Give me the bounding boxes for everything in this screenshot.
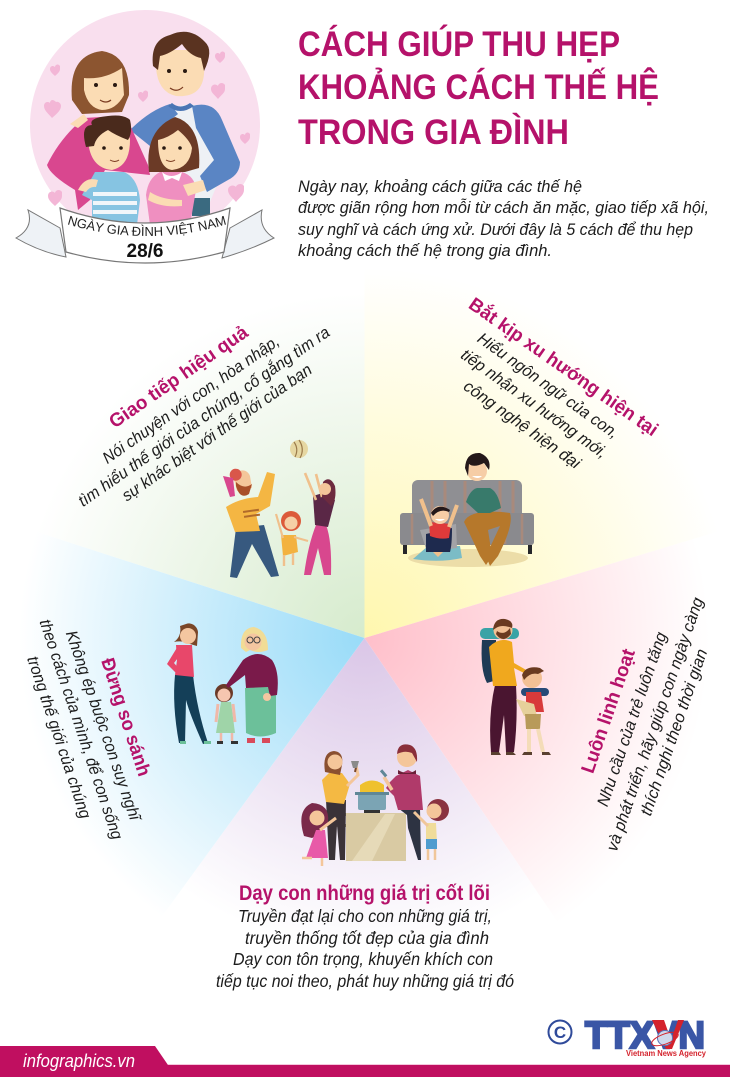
man <box>464 453 511 566</box>
panel: Dạy con những giá trị cốt lõi <box>216 744 514 991</box>
body text: sự khác biệt với thế giới của bạn <box>119 361 315 505</box>
boy <box>421 499 457 557</box>
child <box>215 684 238 744</box>
grandmother <box>226 627 278 743</box>
heading: Luôn linh hoạt <box>578 646 640 776</box>
body text: công nghệ hiện đại <box>460 377 585 473</box>
body text: tiếp tục noi theo, phát huy những giá trị đó <box>216 971 514 991</box>
illustration: family portrait with banner <box>15 10 275 264</box>
girl <box>276 511 308 566</box>
body text: Hiểu ngôn ngữ của con, <box>474 330 622 442</box>
title: KHOẢNG CÁCH THẾ HỆ <box>298 67 659 107</box>
body text: Truyền đạt lại cho con những giá trị, <box>238 906 492 926</box>
counter <box>324 813 406 861</box>
intro text: suy nghĩ và cách ứng xử. Dưới đây là 5 cách để thu hẹp <box>298 221 693 239</box>
body text <box>216 906 514 991</box>
father <box>130 32 240 216</box>
intro text: Ngày nay, khoảng cách giữa các thế hệ <box>298 178 582 196</box>
panel: Giao tiếp hiệu quả <box>74 322 335 578</box>
panel: Đừng so sánh <box>23 617 278 843</box>
body text: Nhu cầu của trẻ luôn tăng <box>594 629 671 809</box>
body text: Không ép buộc con suy nghĩ <box>62 628 145 825</box>
logo: TTXVN: TTXVN <box>585 1015 705 1057</box>
footer site name: infographics.vn <box>23 1051 135 1071</box>
illustration: family playing ball <box>223 440 336 578</box>
banner date: 28/6 <box>127 241 163 262</box>
intro text <box>298 178 709 260</box>
footer bar <box>0 1046 730 1077</box>
daughter <box>301 803 336 866</box>
body text: tìm hiểu thế giới của chúng, cố gắng tìm ra <box>74 323 333 510</box>
illustration: father and son hiking <box>480 619 551 755</box>
logo: TTXVN: Vietnam News Agency <box>626 1049 707 1058</box>
cooking pot <box>355 780 389 813</box>
body text: Dạy con tôn trọng, khuyến khích con <box>233 949 493 969</box>
panel: Luôn linh hoạt <box>480 594 711 854</box>
son <box>78 116 140 225</box>
mother <box>304 473 336 575</box>
body text: truyền thống tốt đẹp của gia đình <box>245 928 489 948</box>
mother <box>322 751 359 860</box>
mother <box>47 51 150 210</box>
intro text: được giãn rộng hơn mỗi từ cách ăn mặc, giao tiếp xã hội, <box>298 198 709 217</box>
copyright mark <box>548 1020 572 1044</box>
father <box>480 619 528 755</box>
title <box>298 24 659 152</box>
father <box>223 469 279 578</box>
son <box>414 799 449 860</box>
son <box>516 667 551 755</box>
intro text: khoảng cách thế hệ trong gia đình. <box>298 242 552 260</box>
heading: Đừng so sánh <box>96 656 154 779</box>
heading: Dạy con những giá trị cốt lõi <box>239 882 490 905</box>
body text: Nói chuyện với con, hòa nhập, <box>99 332 283 467</box>
heading: Bắt kịp xu hướng hiện tại <box>465 293 662 441</box>
body text: trong thế giới của chúng <box>23 654 94 822</box>
body text: thích nghi theo thời gian <box>637 647 711 818</box>
illustration: mother, child and grandmother <box>167 623 278 744</box>
banner text: NGÀY GIA ĐÌNH VIỆT NAM <box>68 216 226 236</box>
banner <box>15 207 275 264</box>
daughter <box>146 117 206 225</box>
illustration: father and son on sofa <box>400 453 534 567</box>
body text: tiếp nhận xu hướng mới, <box>457 346 610 462</box>
title: TRONG GIA ĐÌNH <box>298 112 569 152</box>
father <box>380 744 423 860</box>
illustration: family cooking <box>301 744 449 866</box>
body text: theo cách của mình, để con sống <box>36 617 126 843</box>
body text: và phát triển, hãy giúp con ngày càng <box>603 594 708 854</box>
title: CÁCH GIÚP THU HẸP <box>298 24 620 64</box>
copyright mark: C <box>554 1023 566 1042</box>
heading: Giao tiếp hiệu quả <box>106 322 253 433</box>
panel: Bắt kịp xu hướng hiện tại <box>400 293 662 567</box>
mother <box>167 623 211 744</box>
